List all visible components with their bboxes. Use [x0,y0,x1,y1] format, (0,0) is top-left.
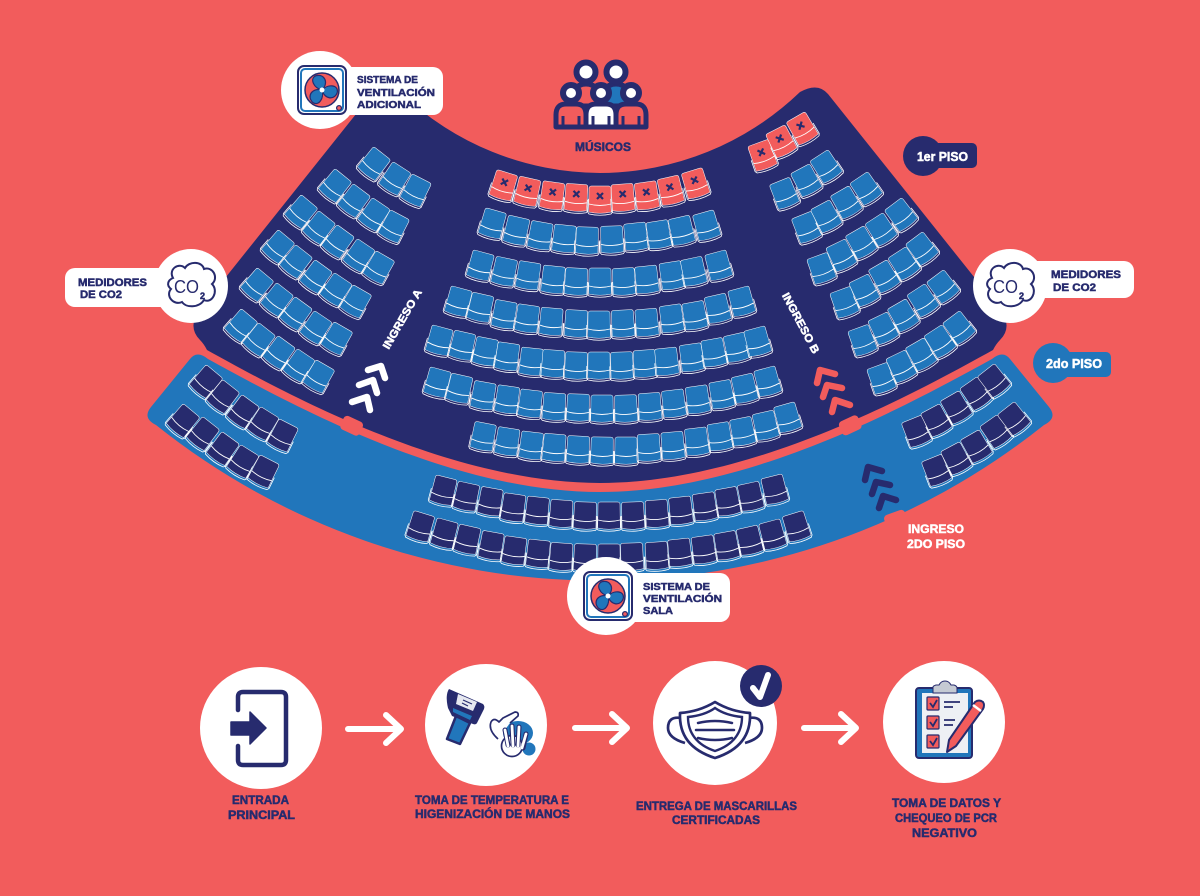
callout: CO2 meters left: MEDIDORES [78,277,147,289]
arrows: entrance B chevrons [817,370,850,412]
panel: first floor seating area [193,87,1007,483]
step 4: data and PCR check: NEGATIVO [912,826,977,840]
label: Ingreso B: INGRESO B [779,291,821,356]
callout: additional ventilation: ADICIONAL [357,99,422,111]
icon: check badge [740,665,782,707]
callout: room ventilation: VENTILACIÓN [643,592,722,605]
tag: first floor [903,136,977,176]
entrance notch A [339,415,364,437]
label: second floor entrance: INGRESO [908,522,964,536]
left seating block, first floor [221,146,433,397]
label: second floor entrance: 2DO PISO [907,537,965,551]
step 2: temperature and hand hygiene [415,664,570,821]
tag: second floor [1033,343,1111,383]
reserved red seats, right [746,111,821,175]
arrow: step 3 to 4 [804,714,856,742]
left seating block, second floor [163,364,300,491]
callout: CO2 meters right: MEDIDORES [1051,269,1121,281]
entrance notch second floor [883,509,909,531]
callout: room ventilation: SISTEMA DE [643,581,710,593]
arrow: step 1 to 2 [348,715,401,743]
label: Ingreso A: INGRESO A [381,287,425,352]
tag: first floor: 1er PISO [917,150,968,164]
step 4: data and PCR check [883,661,1005,840]
step 1: main entrance: PRINCIPAL [228,808,295,822]
tag: second floor: 2do PISO [1046,357,1102,371]
callout: CO2 meters left: 2 [200,291,205,301]
icon: musicians [556,62,646,127]
reserved red seats, centre [487,167,712,215]
callout: additional ventilation: SISTEMA DE [357,74,418,86]
label: músicos: MÚSICOS [575,139,631,154]
arrow: step 2 to 3 [575,714,627,742]
label: second floor entrance [907,522,965,551]
callout: CO2 meters left [65,249,228,323]
centre seating block, first floor [421,207,804,466]
step 2: temperature and hand hygiene: HIGENIZACIÓN DE MANOS [415,806,570,821]
callout: CO2 meters right: CO [993,277,1018,297]
arrows: second floor chevrons [865,467,896,508]
right seating block, second floor [900,363,1034,490]
step 3: certified masks: CERTIFICADAS [672,813,760,827]
entrance notch B [838,414,863,437]
step 2: temperature and hand hygiene: TOMA DE TEMPERATURA E [415,793,569,807]
centre seating block, second floor [404,473,813,574]
arrows: entrance A chevrons [352,366,385,410]
callout: CO2 meters right: 2 [1019,291,1024,301]
right seating block, first floor [768,149,978,398]
step 1: main entrance: ENTRADA [232,793,289,807]
step 3: certified masks [636,661,797,827]
callout: CO2 meters right: DE CO2 [1053,282,1096,294]
callout: room ventilation: SALA [643,605,673,617]
panel: second floor seating area [147,354,1053,581]
callout: CO2 meters left: CO [174,277,199,297]
callout: room ventilation [567,557,730,635]
callout: additional ventilation: VENTILACIÓN [357,86,435,99]
callout: additional ventilation [281,51,443,129]
step 3: certified masks: ENTREGA DE MASCARILLAS [636,799,797,813]
step 4: data and PCR check: TOMA DE DATOS Y [892,796,1001,810]
callout: CO2 meters right [973,249,1134,323]
step 1: main entrance [200,667,322,822]
step 4: data and PCR check: CHEQUEO DE PCR [895,811,997,825]
callout: CO2 meters left: DE CO2 [80,289,122,301]
